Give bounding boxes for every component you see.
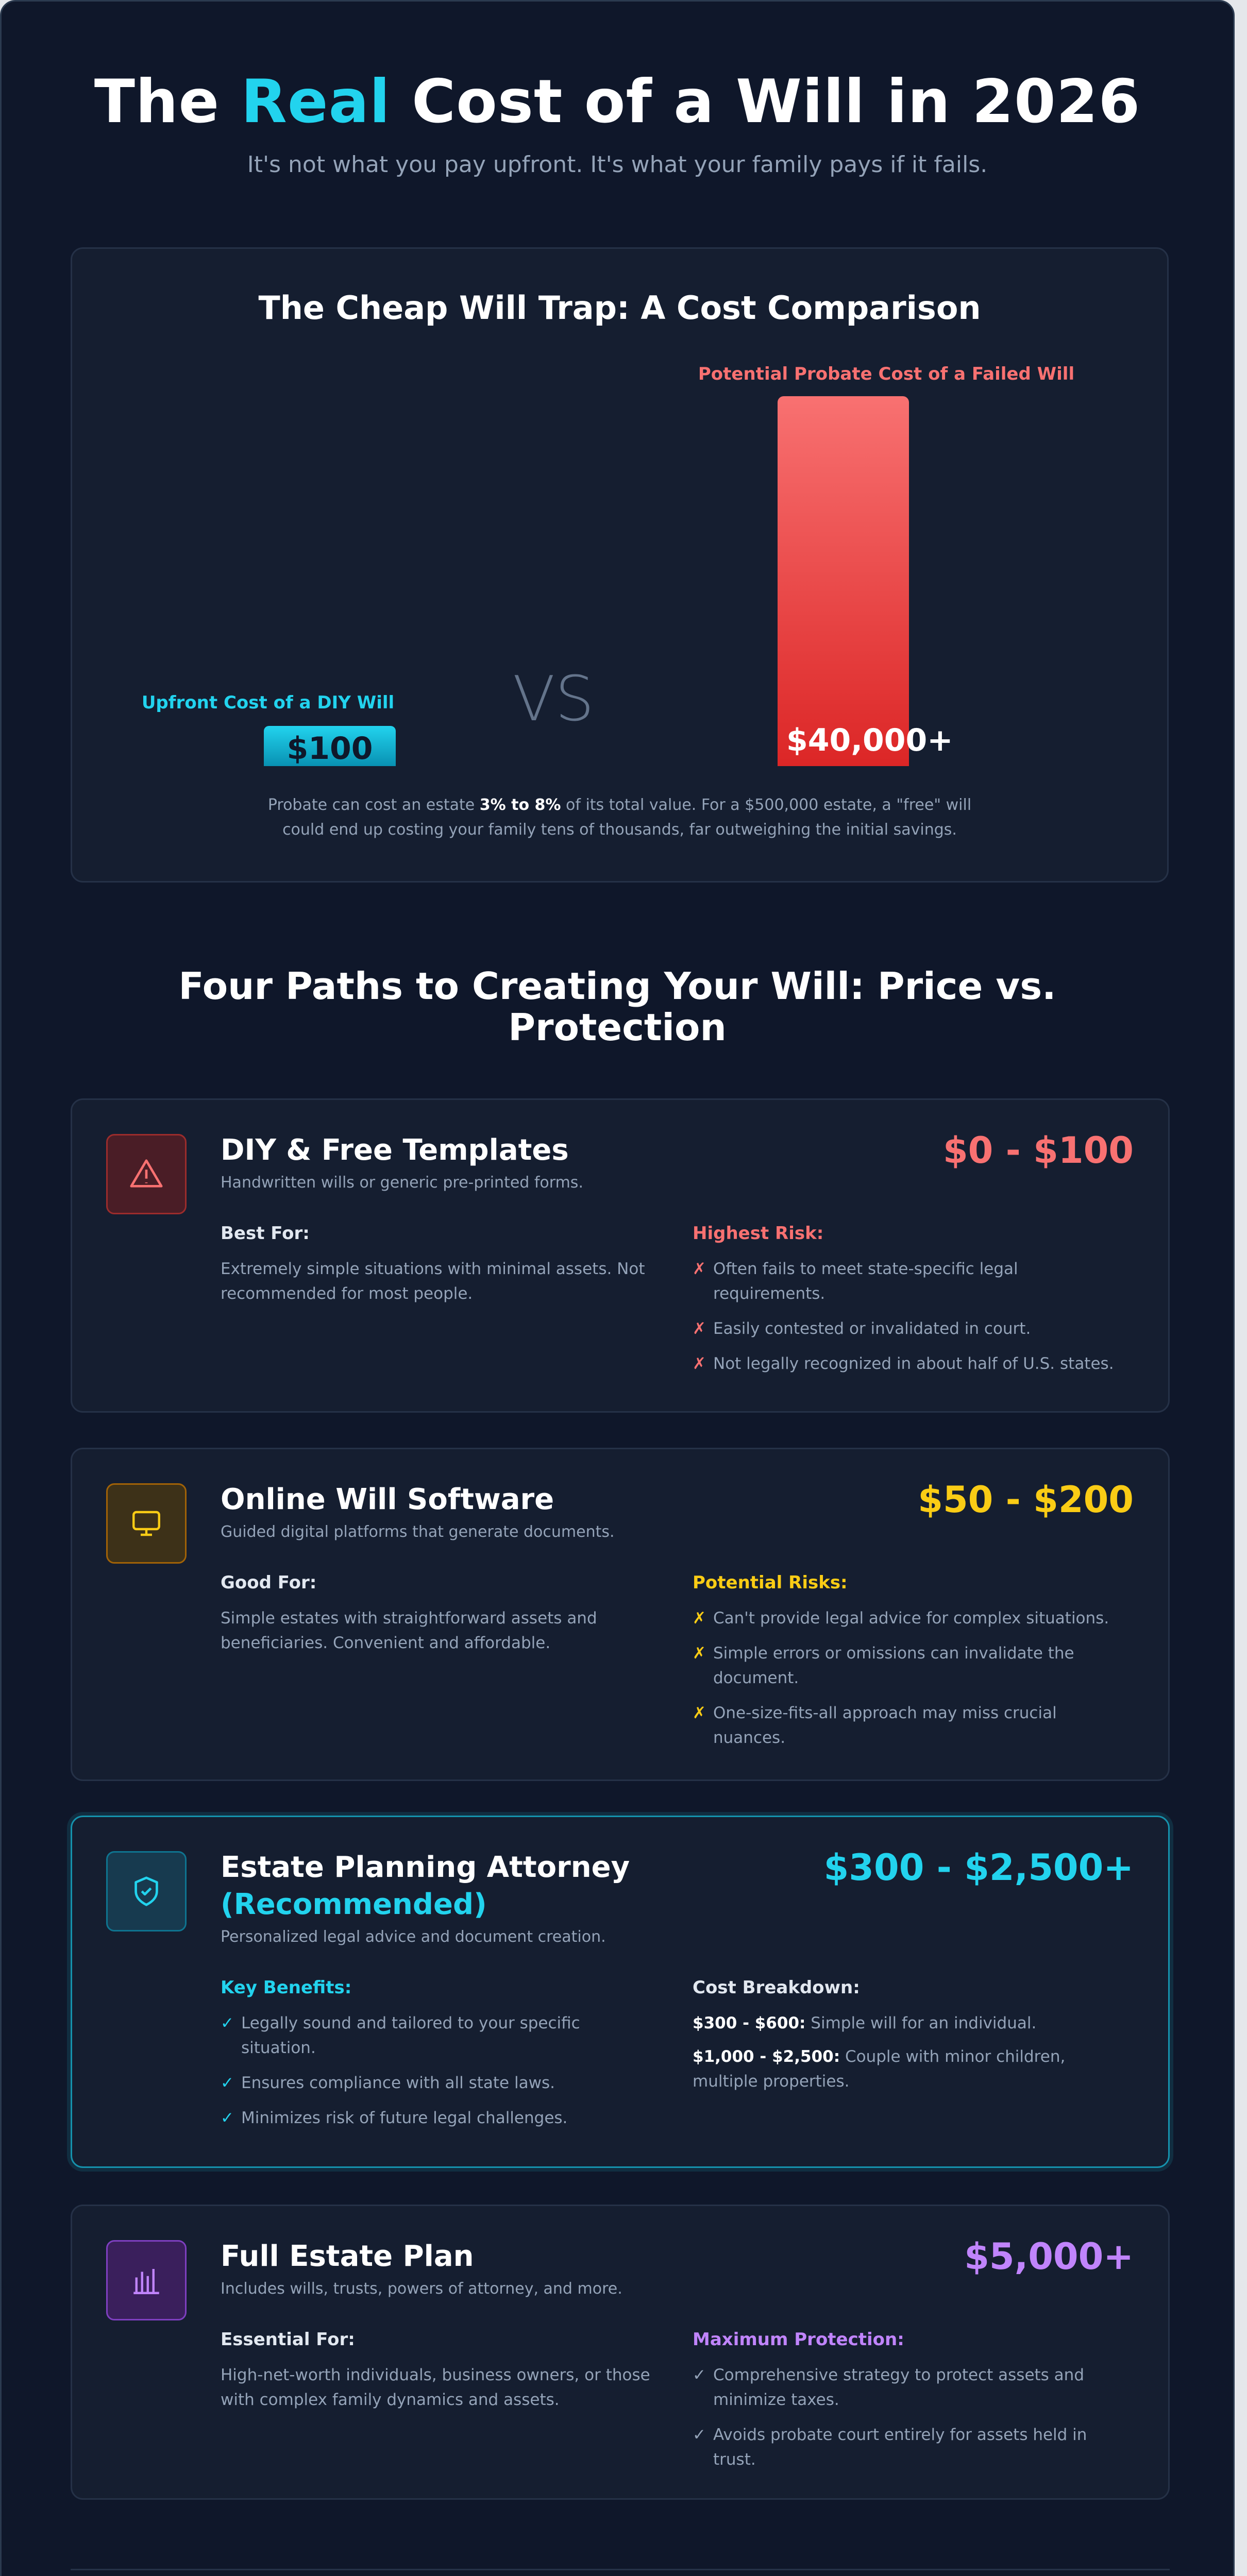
- column: benefits: Ensures compliance with all state laws.: [241, 2074, 555, 2092]
- column: essential for: with complex family dynamics and assets.: [221, 2391, 560, 2409]
- subtitle: It's not what you pay upfront. It's what your family pays if it fails.: [247, 151, 987, 178]
- column: risks: Not legally recognized in about half of U.S. states.: [713, 1354, 1114, 1373]
- label: failed will: Potential Probate Cost of a Failed Will: [698, 364, 1074, 384]
- panel heading: The Cheap Will Trap: A Cost Comparison: [258, 289, 981, 327]
- column: benefits: ✓: [221, 2074, 234, 2092]
- icon: shield: [106, 1851, 187, 1931]
- column: protection: trust.: [713, 2450, 756, 2469]
- column: essential for: Essential For:: [221, 2329, 355, 2350]
- column: risks: requirements.: [713, 1284, 825, 1303]
- column: risks: Potential Risks:: [693, 1572, 848, 1593]
- column: benefits: ✓: [221, 2014, 234, 2032]
- card title: Online Will Software: [221, 1483, 554, 1516]
- column: best for: [221, 1223, 645, 1303]
- column: benefits: [221, 1977, 580, 2127]
- column: cost breakdown: $300 - $600: Simple will for an individual.: [693, 2014, 1036, 2032]
- bar: diy cost: [264, 726, 396, 766]
- column: benefits: Key Benefits:: [221, 1977, 351, 1998]
- column: protection: ✓: [693, 2426, 706, 2444]
- column: protection: Avoids probate court entirely for assets held in: [713, 2426, 1087, 2444]
- column: protection: Comprehensive strategy to protect assets and: [713, 2366, 1084, 2384]
- column: good for: Good For:: [221, 1572, 316, 1593]
- column: risks: document.: [713, 1669, 799, 1687]
- icon: warning: [106, 1134, 187, 1214]
- caption: [268, 796, 971, 839]
- column: risks: Can't provide legal advice for complex situations.: [713, 1609, 1109, 1628]
- column: risks: Easily contested or invalidated in court.: [713, 1319, 1031, 1338]
- column: benefits: situation.: [241, 2039, 316, 2057]
- card: DIY: [71, 1098, 1170, 1413]
- column: risks: [693, 1572, 1109, 1747]
- column: cost breakdown: Cost Breakdown:: [693, 1977, 860, 1998]
- column: best for: Extremely simple situations with minimal assets. Not: [221, 1260, 645, 1278]
- bar: probate cost: [778, 396, 909, 766]
- card: online software: Guided digital platforms that generate documents.: [221, 1523, 615, 1541]
- card title: Estate Planning Attorney (Recommended): [221, 1851, 630, 1921]
- column: risks: ✗: [693, 1704, 706, 1722]
- column: risks: ✗: [693, 1260, 706, 1278]
- column: benefits: Minimizes risk of future legal challenges.: [241, 2109, 567, 2127]
- icon: building chart: [106, 2240, 187, 2320]
- card: DIY: Handwritten wills or generic pre-printed forms.: [221, 1174, 583, 1192]
- column: cost breakdown: multiple properties.: [693, 2072, 849, 2091]
- column: protection: ✓: [693, 2366, 706, 2384]
- column: risks: [693, 1223, 1114, 1373]
- column: benefits: Legally sound and tailored to your specific: [241, 2014, 580, 2032]
- column: protection: [693, 2329, 1087, 2469]
- column: protection: minimize taxes.: [713, 2391, 839, 2409]
- caption: could end up costing your family tens of thousands, far outweighing the initial savings.: [282, 821, 957, 839]
- card: full estate plan: [71, 2205, 1170, 2500]
- column: best for: recommended for most people.: [221, 1284, 473, 1303]
- column: benefits: ✓: [221, 2109, 234, 2127]
- column: risks: nuances.: [713, 1728, 785, 1747]
- column: cost breakdown: $1,000 - $2,500: Couple with minor children,: [693, 2047, 1065, 2066]
- column: risks: Often fails to meet state-specific legal: [713, 1260, 1018, 1278]
- title: The Real Cost of a Will in 2026: [94, 67, 1140, 137]
- price: $0 - $100: [943, 1129, 1134, 1172]
- price: $300 - $2,500+: [824, 1846, 1134, 1889]
- column: good for: Simple estates with straightforward assets and: [221, 1609, 597, 1628]
- vs label: VS: [513, 664, 594, 735]
- bar: diy cost: $100: [287, 731, 373, 767]
- card: online software: [71, 1448, 1170, 1781]
- card: full estate plan: Includes wills, trusts, powers of attorney, and more.: [221, 2280, 622, 2298]
- column: risks: ✗: [693, 1354, 706, 1373]
- column: risks: One-size-fits-all approach may miss crucial: [713, 1704, 1057, 1722]
- label: diy: Upfront Cost of a DIY Will: [142, 692, 394, 713]
- card: attorney (recommended): [71, 1816, 1170, 2168]
- column: protection: Maximum Protection:: [693, 2329, 904, 2350]
- card title: DIY & Free Templates: [221, 1133, 569, 1167]
- panel: cost comparison: [71, 247, 1169, 883]
- caption: Probate can cost an estate 3% to 8% of its total value. For a $500,000 estate, a "free" will: [268, 796, 971, 814]
- column: risks: Simple errors or omissions can invalidate the: [713, 1644, 1074, 1663]
- column: cost breakdown: [693, 1977, 1065, 2091]
- section heading: four paths: Four Paths to Creating Your Will: Price vs.: [178, 964, 1056, 1008]
- column: risks: ✗: [693, 1609, 706, 1628]
- section heading: four paths: Protection: [508, 1006, 727, 1049]
- section heading: four paths: [178, 964, 1056, 1049]
- column: essential for: High-net-worth individuals, business owners, or those: [221, 2366, 650, 2384]
- value: 40000: $40,000+: [786, 722, 953, 758]
- column: good for: [221, 1572, 597, 1652]
- column: good for: beneficiaries. Convenient and affordable.: [221, 1634, 550, 1652]
- card: attorney (recommended): Personalized legal advice and document creation.: [221, 1928, 606, 1946]
- column: risks: ✗: [693, 1319, 706, 1338]
- price: $5,000+: [964, 2235, 1134, 2278]
- column: risks: Highest Risk:: [693, 1223, 823, 1244]
- column: best for: Best For:: [221, 1223, 310, 1244]
- price: $50 - $200: [918, 1479, 1134, 1521]
- column: essential for: [221, 2329, 650, 2409]
- icon: monitor: [106, 1483, 187, 1564]
- column: risks: ✗: [693, 1644, 706, 1663]
- card title: Full Estate Plan: [221, 2240, 474, 2273]
